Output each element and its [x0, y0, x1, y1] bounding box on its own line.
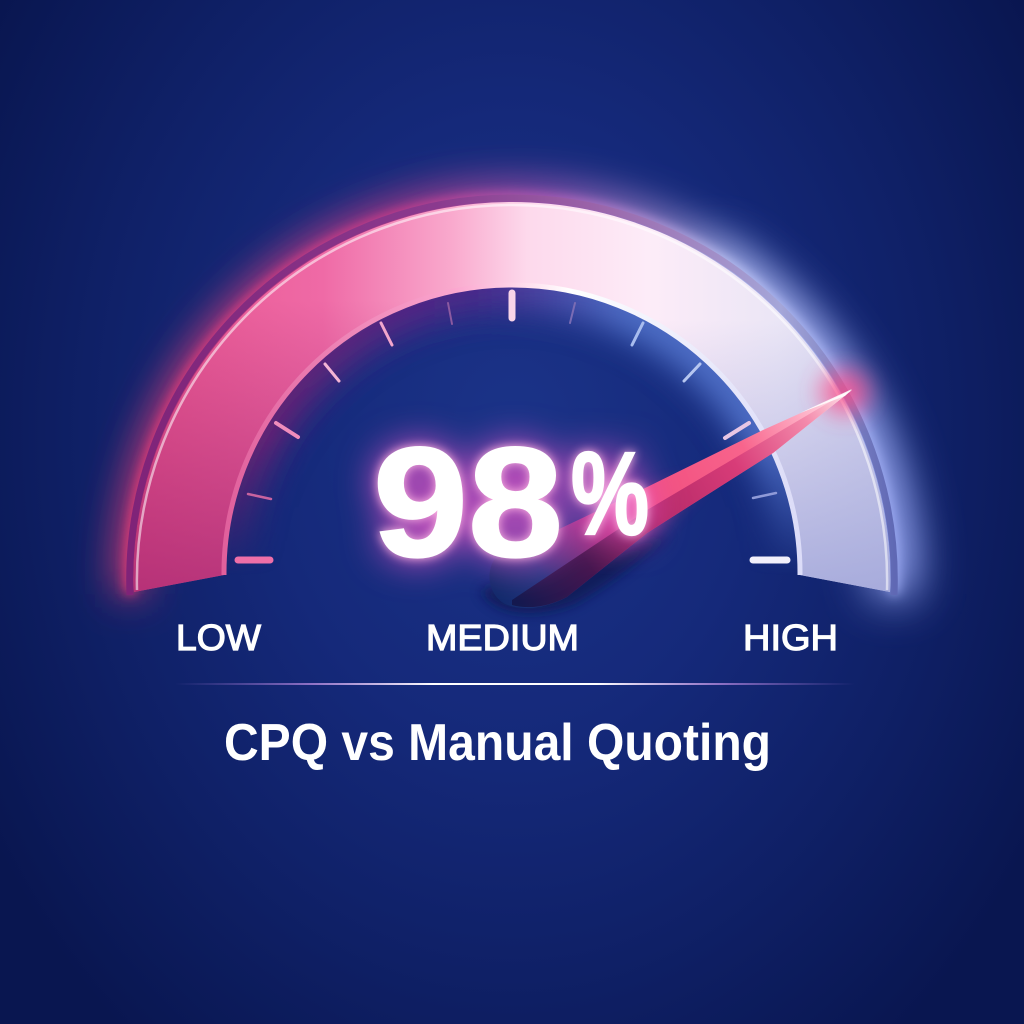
gauge value — [373, 416, 649, 590]
gauge value: % — [571, 428, 649, 560]
gauge value: 98 — [373, 416, 563, 590]
gauge inner shading — [227, 288, 797, 560]
scale labels: MEDIUM — [426, 617, 579, 658]
scale labels: HIGH — [743, 617, 838, 658]
scale labels — [176, 617, 838, 658]
gauge outer glow — [130, 198, 894, 594]
gauge needle — [480, 370, 869, 613]
gauge arc band — [130, 198, 894, 595]
gauge tick marks — [238, 293, 787, 560]
title: CPQ vs Manual Quoting — [224, 714, 771, 772]
divider line — [175, 683, 855, 685]
scale labels: LOW — [176, 617, 261, 658]
